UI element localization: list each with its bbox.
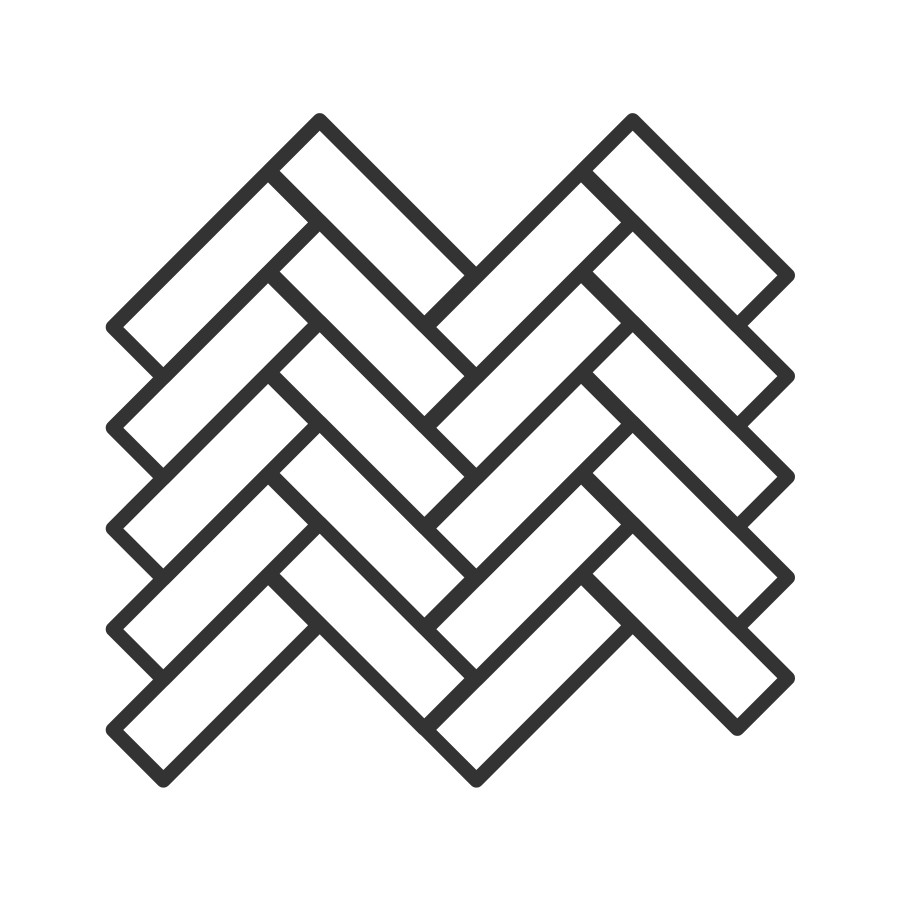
brick: column 3 up-right row 3 xyxy=(426,374,631,579)
column 3 up-right bricks xyxy=(426,172,631,780)
brick: column 1 up-right row 4 xyxy=(113,474,318,680)
brick: column 3 up-right row 5 xyxy=(426,575,631,780)
brick: column 1 up-right row 5 xyxy=(113,575,318,780)
brick: column 4 down-right row 5 xyxy=(582,523,788,729)
brick: column 2 down-right row 1 xyxy=(269,120,475,326)
column 1 up-right bricks xyxy=(113,172,318,780)
brick: column 4 down-right row 1 xyxy=(582,120,788,326)
brick: column 1 up-right row 1 xyxy=(113,172,318,378)
brick: column 4 down-right row 4 xyxy=(582,422,788,628)
brick: column 2 down-right row 2 xyxy=(269,221,475,426)
brick: column 3 up-right row 4 xyxy=(426,474,631,680)
column 4 down-right bricks xyxy=(582,120,788,729)
brick: column 1 up-right row 3 xyxy=(113,374,318,579)
column 2 down-right bricks xyxy=(269,120,475,729)
brick: column 2 down-right row 4 xyxy=(269,422,475,628)
brick: column 2 down-right row 3 xyxy=(269,322,475,527)
brick: column 4 down-right row 3 xyxy=(582,322,788,527)
brick: column 4 down-right row 2 xyxy=(582,221,788,426)
brick: column 2 down-right row 5 xyxy=(269,523,475,729)
brick: column 3 up-right row 1 xyxy=(426,172,631,378)
brick: column 3 up-right row 2 xyxy=(426,273,631,478)
brick: column 1 up-right row 2 xyxy=(113,273,318,478)
